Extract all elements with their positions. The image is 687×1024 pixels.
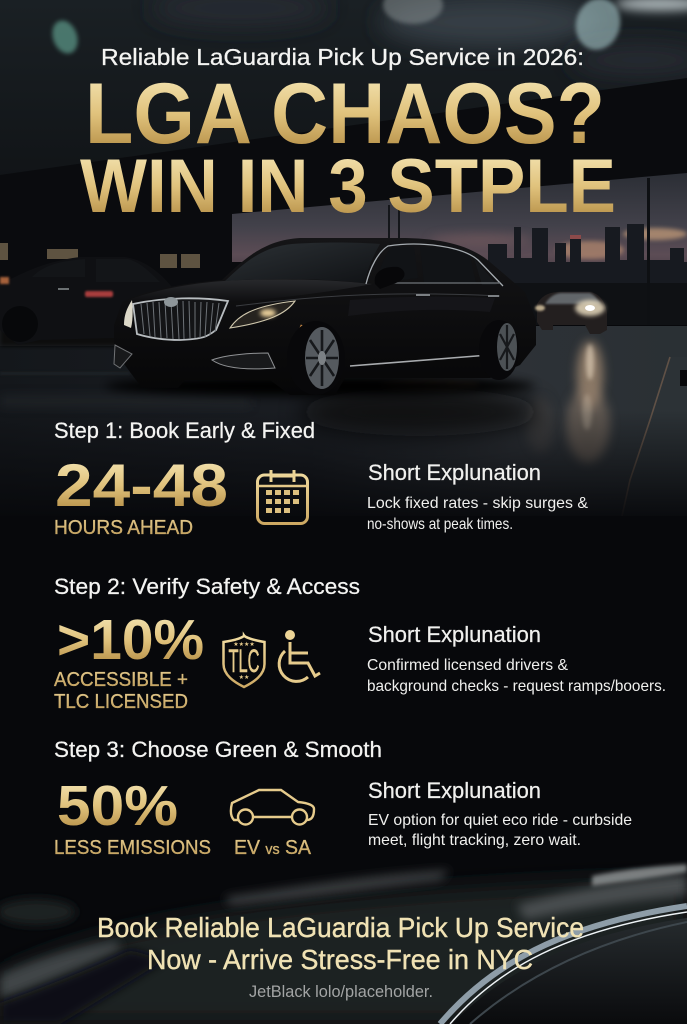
background car right (535, 292, 607, 334)
stat label (54, 668, 188, 713)
step 3 explanation: Short Explunation (368, 778, 541, 803)
icon: wheelchair (279, 630, 320, 681)
building windows (0, 243, 200, 268)
title: LGA CHAOS? (85, 66, 605, 162)
step 1 (54, 418, 588, 539)
icon: TLC shield: ★★ (239, 674, 249, 681)
step 1 heading: Step 1: Book Early & Fixed (54, 418, 315, 443)
sunset sky and skyline (232, 173, 687, 325)
step 2 explanation (367, 622, 666, 695)
icon: calendar (258, 470, 308, 524)
icon: TLC shield: TLC (228, 643, 260, 679)
front wheel (287, 321, 345, 395)
stat >10%: >10% (57, 608, 204, 672)
stat 50%: 50% (57, 774, 178, 838)
title (80, 66, 616, 229)
icon label: EV vs SA (234, 836, 311, 859)
step 2 explanation: Short Explunation (368, 622, 541, 647)
limousine (105, 238, 536, 396)
step 3 heading: Step 3: Choose Green & Smooth (54, 737, 382, 762)
subtitle: Reliable LaGuardia Pick Up Service in 2026: (101, 44, 584, 70)
stat 24-48: 24-48 (55, 452, 228, 519)
stat label: LESS EMISSIONS (54, 836, 211, 859)
logo placeholder: JetBlack lolo/placeholder. (249, 982, 433, 1001)
step 3 explanation: EV option for quiet eco ride - curbside (368, 812, 632, 829)
step 3 explanation (368, 778, 632, 849)
icon: car outline (231, 790, 314, 824)
stat label: TLC LICENSED (54, 690, 188, 713)
step 2 heading: Step 2: Verify Safety & Access (54, 574, 360, 599)
headlights (124, 300, 302, 337)
stat label: ACCESSIBLE + (54, 668, 188, 691)
grille (133, 297, 228, 340)
icon: TLC shield (224, 636, 264, 687)
step 1 explanation (367, 460, 588, 533)
chrome trim (440, 906, 687, 1024)
road fade into dark panel (0, 410, 687, 525)
wet road (0, 326, 687, 516)
background car left (0, 257, 172, 345)
stat label: HOURS AHEAD (54, 516, 193, 539)
call to action: Book Reliable LaGuardia Pick Up Service (97, 912, 584, 943)
lens flares (48, 0, 626, 57)
terminal roof silhouette (0, 78, 687, 345)
step 1 explanation: no-shows at peak times. (367, 516, 513, 533)
step 1 explanation: Short Explunation (368, 460, 541, 485)
step 1 explanation: Lock fixed rates - skip surges & (367, 495, 588, 512)
step 2 explanation: Confirmed licensed drivers & (367, 657, 568, 674)
step 3 explanation: meet, flight tracking, zero wait. (368, 832, 581, 849)
step 3 (54, 737, 632, 859)
step 2 explanation: background checks - request ramps/booers. (367, 678, 666, 695)
call to action: Now - Arrive Stress-Free in NYC (147, 944, 533, 975)
blurred car roof foreground (0, 864, 687, 1024)
step 2 (54, 574, 666, 713)
lit roof panels (0, 880, 687, 1024)
stormy sky (0, 0, 687, 180)
call to action (97, 912, 584, 975)
bumper vents (212, 353, 275, 369)
icon: TLC shield: ★★★★ (233, 641, 255, 648)
rear wheel (479, 320, 519, 380)
title: WIN IN 3 STPLE (80, 144, 616, 229)
